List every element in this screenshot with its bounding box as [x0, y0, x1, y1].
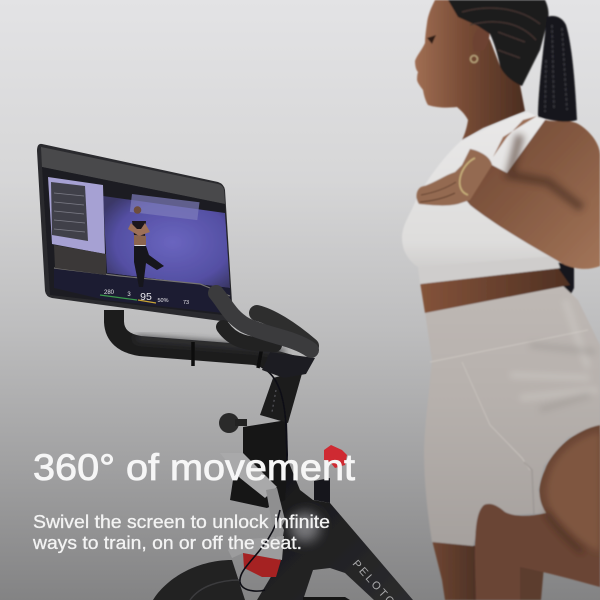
- standing leg: [432, 540, 476, 600]
- ear: [472, 27, 489, 52]
- metrics readout: 73: [183, 300, 189, 306]
- studio backdrop: [103, 196, 230, 288]
- lilac side panel: [48, 177, 105, 254]
- eye: [427, 35, 436, 44]
- hair on head: [448, 0, 549, 86]
- cornrow highlights: [462, 8, 540, 58]
- fabric top band: [41, 147, 225, 204]
- silver clamp: [220, 453, 277, 498]
- post bracket block: [230, 420, 288, 508]
- red adjustment knob: [324, 445, 347, 468]
- crop top: [402, 112, 560, 284]
- ponytail: [538, 16, 577, 122]
- backdrop stripes: [130, 194, 199, 220]
- wheel: [153, 560, 245, 600]
- front aero bar: [216, 293, 311, 350]
- exercise bike: [114, 293, 413, 600]
- class menu overlay: [51, 182, 88, 241]
- shorts: [424, 283, 600, 546]
- adjustment knob: [219, 413, 247, 433]
- lower handlebar: [114, 310, 295, 368]
- hand on chest: [417, 149, 492, 206]
- woman in white crop top and shorts: [402, 0, 600, 600]
- stem head: [262, 352, 315, 378]
- subheading text: ways to train, on or off the seat.: [32, 533, 302, 553]
- lower ponytail: [556, 262, 574, 294]
- racer back strap gap: [493, 116, 537, 157]
- metrics readout: 50%: [157, 298, 169, 304]
- yoga instructor: [128, 206, 164, 287]
- stem: [260, 370, 303, 423]
- metrics readout: 95: [140, 291, 152, 303]
- shoulder and upper arm: [458, 120, 600, 269]
- seat post collar: [314, 478, 330, 503]
- red brake pad: [243, 553, 281, 577]
- fingers: [420, 182, 456, 202]
- earring: [470, 56, 478, 62]
- rear aero bar: [223, 327, 275, 345]
- rear leg segment: [510, 560, 544, 600]
- cables: [240, 366, 287, 591]
- metrics readout: 3: [127, 292, 131, 298]
- metrics readout: [104, 290, 189, 306]
- bent knee and thigh: [475, 425, 600, 600]
- midriff: [420, 268, 570, 313]
- bracelet: [460, 158, 475, 195]
- effort bar: [100, 295, 137, 300]
- neck and face: [415, 0, 525, 140]
- subheading text: [32, 512, 330, 553]
- frame highlight: [290, 512, 320, 542]
- display: [42, 167, 232, 316]
- metrics readout: 280: [104, 290, 115, 296]
- studio floor: [54, 268, 231, 314]
- heading: 360° of movement: [33, 447, 356, 488]
- tablet body: [37, 144, 233, 322]
- subheading text: Swivel the screen to unlock infinite: [33, 512, 330, 532]
- silver mount: [228, 536, 284, 560]
- tablet screen: [37, 144, 233, 322]
- waistband seam: [430, 330, 588, 362]
- band shade: [418, 256, 560, 284]
- arm shadow: [510, 135, 582, 208]
- frame lower strut: [303, 597, 350, 600]
- bike frame: [257, 453, 413, 600]
